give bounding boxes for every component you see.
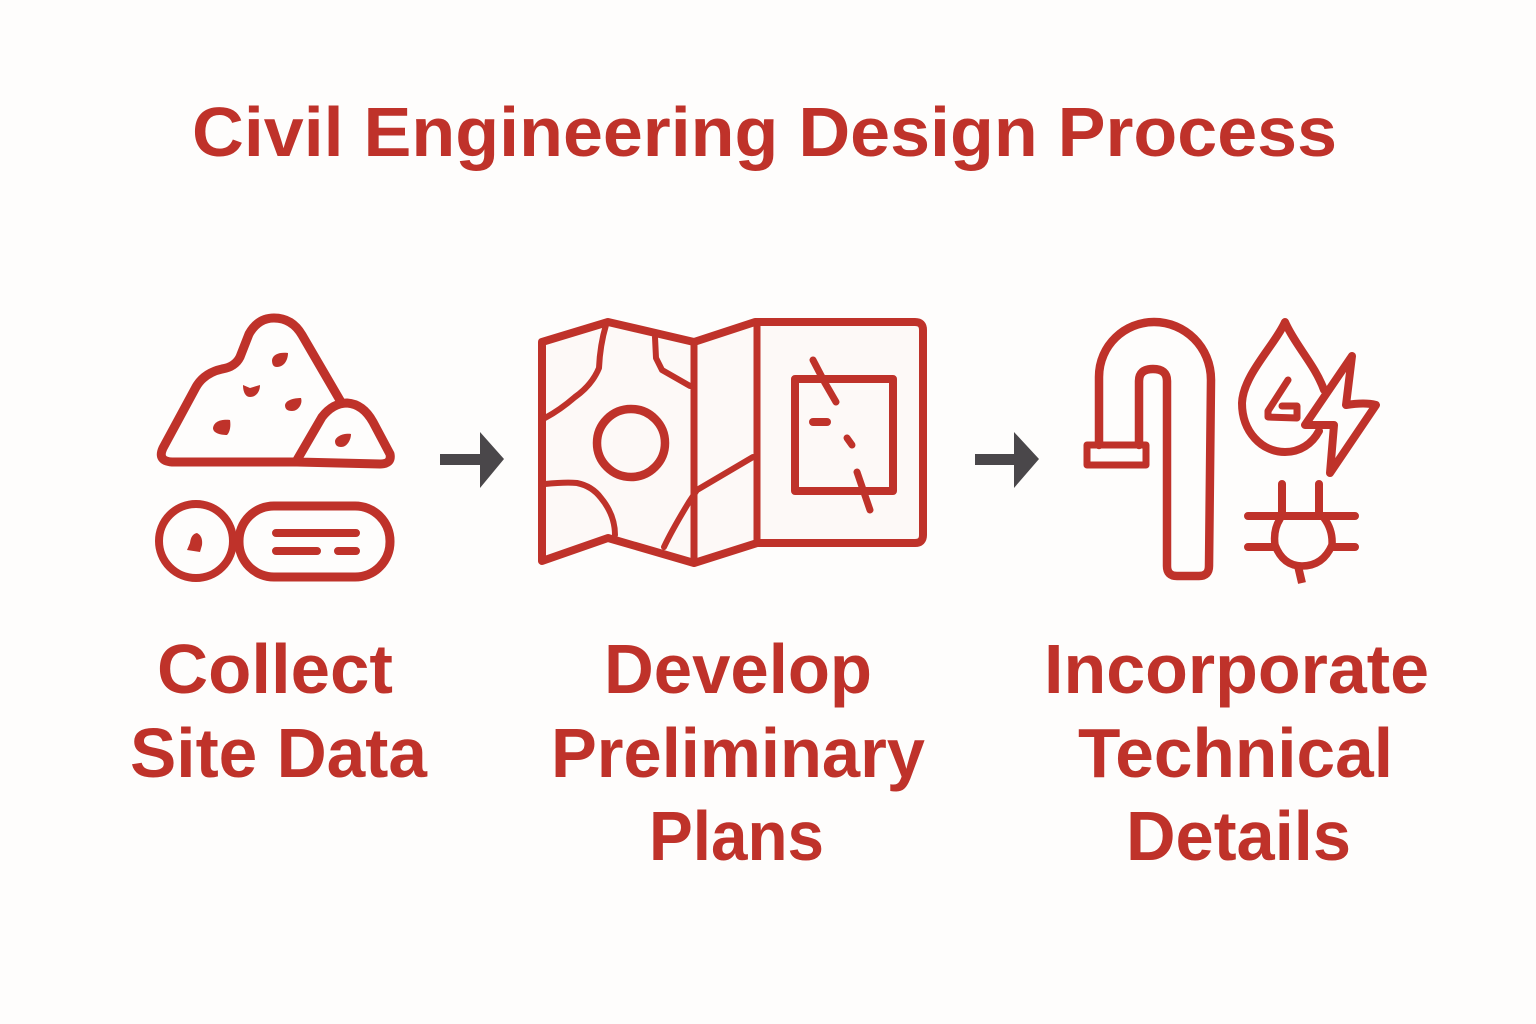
arrow 2 xyxy=(975,432,1039,488)
label: Collect Site Data: Site Data xyxy=(130,714,428,792)
lightning bolt xyxy=(1305,356,1376,473)
label: Develop Preliminary Plans xyxy=(551,630,925,875)
water drop xyxy=(1242,322,1324,452)
label: Develop Preliminary Plans: Develop xyxy=(604,630,872,708)
pipe flange xyxy=(1087,445,1146,465)
data pill lines xyxy=(276,533,356,551)
soil stones xyxy=(213,353,351,447)
data pill xyxy=(239,506,390,577)
icon: soil pile and site data xyxy=(159,318,390,578)
label: Incorporate Technical Details xyxy=(1044,630,1429,875)
title: Civil Engineering Design Process xyxy=(192,93,1337,171)
icon: pipe, water and power xyxy=(1087,322,1376,583)
data circle xyxy=(159,504,233,578)
data circle marker xyxy=(187,533,202,552)
plan dashed diagonal xyxy=(813,360,870,510)
label: Incorporate Technical Details: Technical xyxy=(1078,714,1393,792)
large soil mound xyxy=(161,318,341,462)
label: Incorporate Technical Details: Incorporate xyxy=(1044,630,1429,708)
map folds xyxy=(694,322,757,563)
label: Collect Site Data xyxy=(130,630,428,792)
plug xyxy=(1248,484,1355,583)
label: Develop Preliminary Plans: Preliminary xyxy=(551,714,925,792)
map roads xyxy=(545,325,753,547)
small soil mound xyxy=(297,403,390,464)
icon: folded map with plan xyxy=(542,322,923,563)
label: Incorporate Technical Details: Details xyxy=(1126,797,1351,875)
map sheet xyxy=(542,322,923,563)
plan square xyxy=(795,379,893,491)
arrow 1 xyxy=(440,432,504,488)
pipe xyxy=(1099,322,1211,576)
map circle xyxy=(597,409,665,477)
label: Collect Site Data: Collect xyxy=(157,630,393,708)
label: Develop Preliminary Plans: Plans xyxy=(649,797,824,875)
drop symbol xyxy=(1268,380,1297,418)
